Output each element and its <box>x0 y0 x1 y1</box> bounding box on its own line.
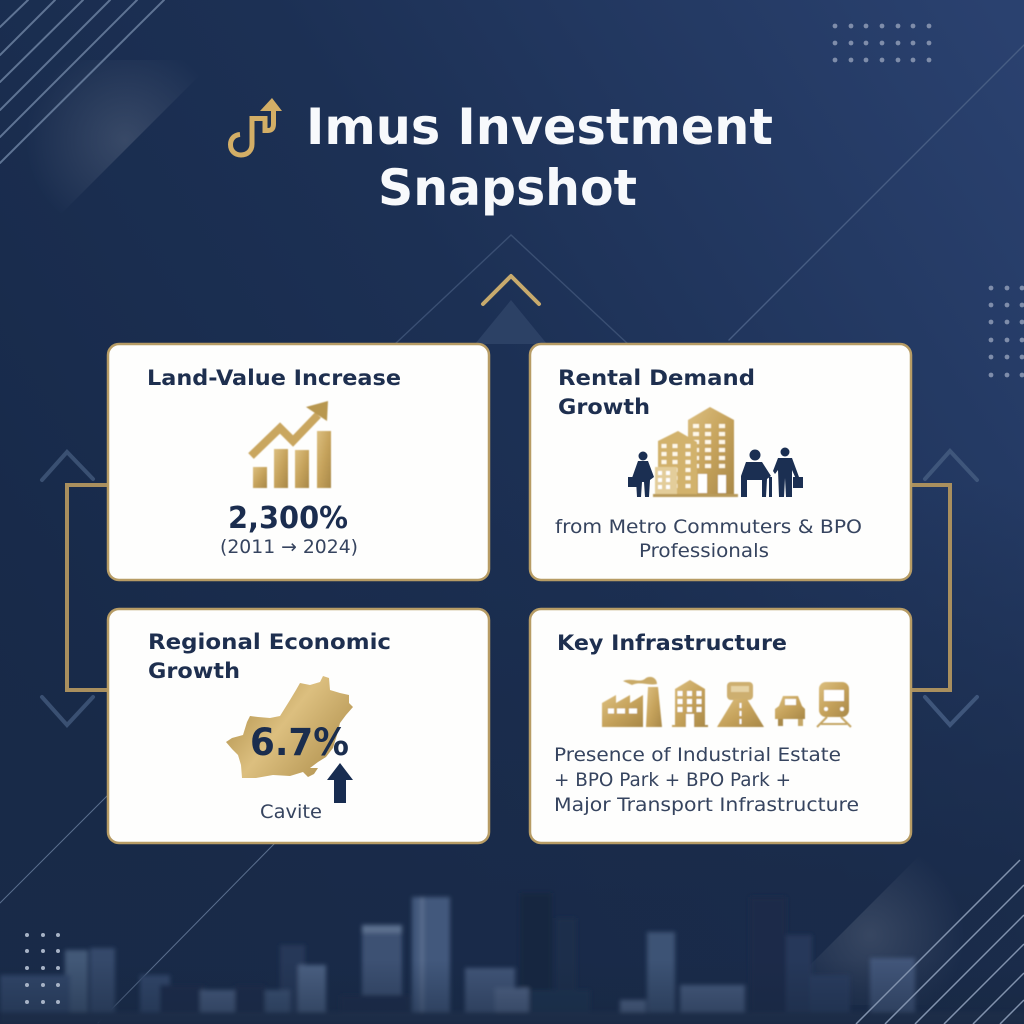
heading: rental demand growth <box>558 366 755 419</box>
icon: standing professional with briefcase <box>773 448 803 497</box>
icon: gold growth note logo <box>230 98 282 155</box>
panel: rental demand growth <box>530 344 911 580</box>
text: infrastructure description: + BPO Park + BPO Park + <box>554 769 791 791</box>
text: infrastructure description: Presence of Industrial Estate <box>554 744 841 766</box>
heading: regional economic growth: Regional Economic <box>148 630 391 654</box>
heading: regional economic growth <box>148 630 391 683</box>
icon: seated professional <box>741 450 772 497</box>
arrow: navy up <box>327 763 353 803</box>
heading: land-value increase: Land-Value Increase <box>147 366 401 390</box>
text: from metro commuters: from Metro Commuters & BPO <box>555 516 862 538</box>
icon: gold buildings <box>653 407 738 497</box>
dot grid: right side <box>989 286 1024 377</box>
panel: regional economic growth <box>108 609 489 843</box>
title: Imus Investment <box>306 98 773 156</box>
text: from metro commuters: Professionals <box>639 540 769 562</box>
panel: land-value increase <box>108 344 489 580</box>
value: 6.7%: 6.7% <box>250 721 349 764</box>
text: infrastructure description <box>554 744 859 816</box>
connector: right bracket <box>909 485 950 690</box>
icon: rising bar chart <box>251 401 331 488</box>
icon: office building <box>672 680 708 727</box>
caption: Cavite: Cavite <box>260 801 322 823</box>
connector: left bracket <box>67 485 110 690</box>
title <box>306 98 773 217</box>
value: 2,300%: 2,300% <box>228 501 348 536</box>
icon: commuter woman <box>628 452 654 497</box>
icon: bus on road <box>717 682 764 727</box>
dot grid: bottom left <box>25 933 60 1004</box>
icon: Cavite map <box>226 676 353 778</box>
text: infrastructure description: Major Transport Infrastructure <box>554 794 859 816</box>
icon: car <box>775 696 805 726</box>
panel: key infrastructure <box>530 609 911 843</box>
skyline silhouette <box>0 893 1024 1024</box>
heading: key infrastructure: Key Infrastructure <box>557 631 787 655</box>
arrow: right chevron up <box>925 451 977 480</box>
heading: regional economic growth: Growth <box>148 659 240 683</box>
arrow: gold chevron up <box>483 276 539 304</box>
caption: years: (2011 → 2024) <box>220 536 358 558</box>
heading: rental demand growth: Rental Demand <box>558 366 755 390</box>
text: from metro commuters <box>555 516 862 562</box>
arrow: left chevron up <box>42 452 93 480</box>
icon: train <box>817 682 851 727</box>
arrow: right chevron down <box>925 697 977 725</box>
heading: rental demand growth: Growth <box>558 395 650 419</box>
title: Snapshot <box>378 159 637 217</box>
arrow: left chevron down <box>42 697 93 725</box>
icon: factory <box>602 677 662 727</box>
dot grid: top right <box>833 24 931 62</box>
